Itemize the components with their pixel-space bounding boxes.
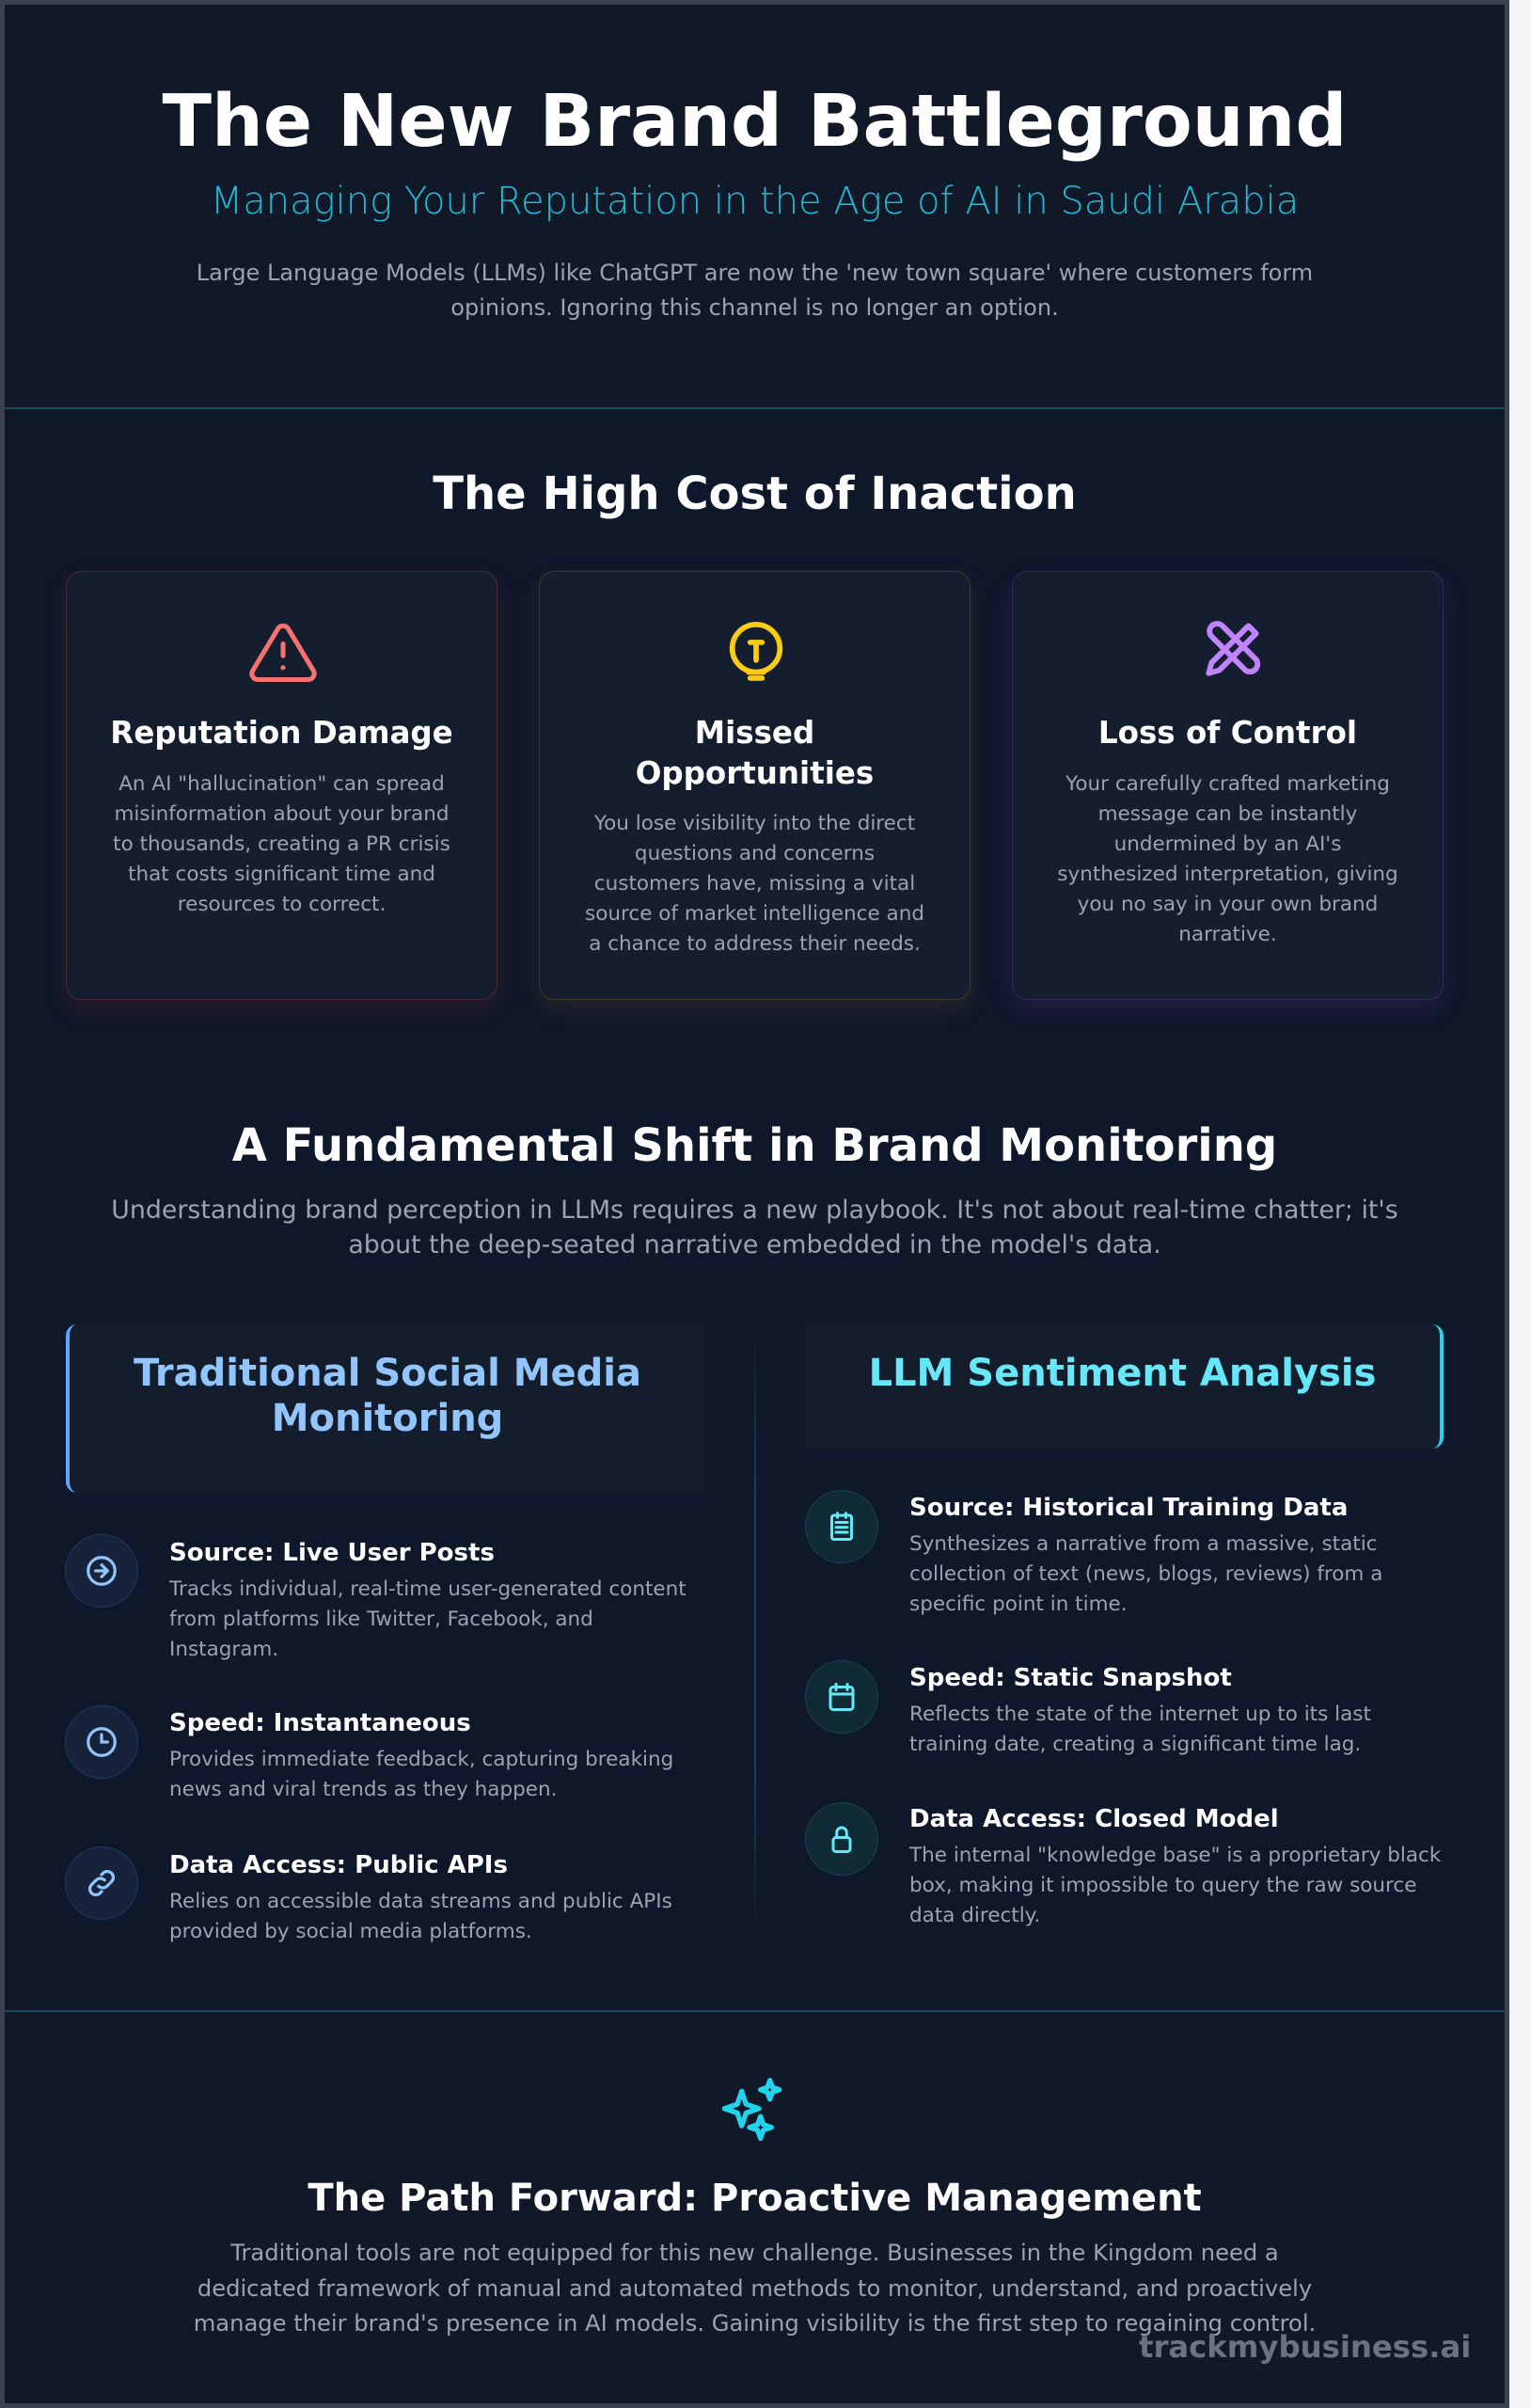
icon: lightbulb [730, 622, 782, 681]
card: missed opportunities: a chance to address their needs. [589, 932, 921, 956]
right items: Source: Historical Training Data [909, 1494, 1348, 1522]
icon: calendar [805, 1660, 878, 1734]
icon: list [805, 1490, 878, 1563]
card: reputation damage: that costs significant time and [128, 863, 435, 886]
header: traditional: Monitoring [272, 1397, 503, 1440]
icon: clock [65, 1705, 138, 1779]
card: loss of control: synthesized interpretation, giving [1057, 863, 1398, 886]
footer section background [5, 2010, 1505, 2012]
icon: sparkles [722, 2078, 782, 2141]
card: missed opportunities: Missed [695, 715, 814, 751]
card: loss of control: undermined by an AI's [1114, 832, 1341, 856]
left items: Data Access: Public APIs [169, 1851, 508, 1879]
card: reputation damage [66, 571, 497, 1000]
icon: tools [1206, 621, 1260, 676]
heading: fundamental shift: A Fundamental Shift in Brand Monitoring [232, 1119, 1277, 1172]
left items: Speed: Instantaneous [169, 1709, 471, 1737]
intro: fundamental shift: Understanding brand perception in LLMs requires a new playbook. It's not about real-time chatter; it's about the deep-seated narrative embedded in the model's data. [111, 1196, 1398, 1259]
card: reputation damage: An AI "hallucination" can spread [118, 772, 445, 796]
watermark: trackmybusiness.ai [1139, 2329, 1471, 2365]
card: loss of control: narrative. [1178, 923, 1277, 946]
left items: Tracks individual, real-time user-generated content from platforms like Twitter, Facebook, and Instagram. [169, 1577, 687, 1661]
card: loss of control [1012, 571, 1444, 1000]
card: missed opportunities: questions and concerns [635, 842, 875, 865]
icon: lock [805, 1802, 878, 1876]
right items: Data Access: Closed Model [909, 1805, 1279, 1833]
card: missed opportunities: source of market intelligence and [585, 902, 924, 926]
text: path forward: Traditional tools are not equipped for this new challenge. Businesses in the Kingdom need a [230, 2240, 1279, 2266]
card: reputation damage: misinformation about your brand [114, 802, 450, 826]
left items: Source: Live User Posts [169, 1539, 495, 1567]
header: traditional: Traditional Social Media [134, 1352, 641, 1395]
heading: path forward: The Path Forward: Proactive Management [308, 2177, 1202, 2220]
left items [65, 1534, 687, 1943]
icon: link [65, 1846, 138, 1920]
header: traditional [66, 1324, 705, 1493]
card: loss of control: message can be instantly [1098, 802, 1357, 826]
header: LLM [805, 1324, 1444, 1449]
icon: warning [249, 623, 317, 682]
intro text [197, 260, 1313, 321]
heading: high cost of inaction: The High Cost of Inaction [433, 467, 1077, 520]
title: The New Brand Battleground [162, 80, 1347, 164]
card: missed opportunities: Opportunities [636, 755, 874, 791]
card: reputation damage: resources to correct. [178, 893, 386, 916]
card: missed opportunities: customers have, missing a vital [594, 872, 915, 895]
intro text: opinions. Ignoring this channel is no longer an option. [450, 294, 1059, 321]
right items: The internal "knowledge base" is a proprietary black box, making it impossible to query the raw source data directly. [909, 1844, 1441, 1927]
card: loss of control: Loss of Control [1098, 715, 1357, 751]
card: reputation damage: Reputation Damage [110, 715, 453, 751]
left items: Relies on accessible data streams and public APIs provided by social media platforms. [169, 1890, 672, 1943]
header section background [5, 5, 1505, 407]
right items: Synthesizes a narrative from a massive, static collection of text (news, blogs, reviews) from a specific point in time. [909, 1532, 1382, 1616]
text: path forward: dedicated framework of manual and automated methods to monitor, understand, and proactively [197, 2274, 1312, 2301]
right items: Speed: Static Snapshot [909, 1664, 1232, 1692]
card: missed opportunities: You lose visibility into the direct [594, 812, 915, 835]
card: reputation damage: to thousands, creating a PR crisis [113, 832, 450, 856]
text: path forward: manage their brand's presence in AI models. Gaining visibility is the first step to regaining control. [194, 2310, 1316, 2337]
header: LLM: LLM Sentiment Analysis [869, 1352, 1376, 1395]
left items: Provides immediate feedback, capturing breaking news and viral trends as they happen. [169, 1748, 673, 1801]
card: loss of control: Your carefully crafted marketing [1065, 772, 1390, 796]
card: missed opportunities [539, 571, 971, 1000]
intro text: Large Language Models (LLMs) like ChatGPT are now the 'new town square' where customers form [197, 260, 1313, 286]
icon: arrow circle [65, 1534, 138, 1608]
subtitle: Managing Your Reputation in the Age of AI in Saudi Arabia [211, 180, 1299, 223]
right items: Reflects the state of the internet up to its last training date, creating a significant time lag. [909, 1703, 1371, 1756]
text: path forward [194, 2240, 1316, 2337]
card: loss of control: you no say in your own brand [1078, 893, 1378, 916]
